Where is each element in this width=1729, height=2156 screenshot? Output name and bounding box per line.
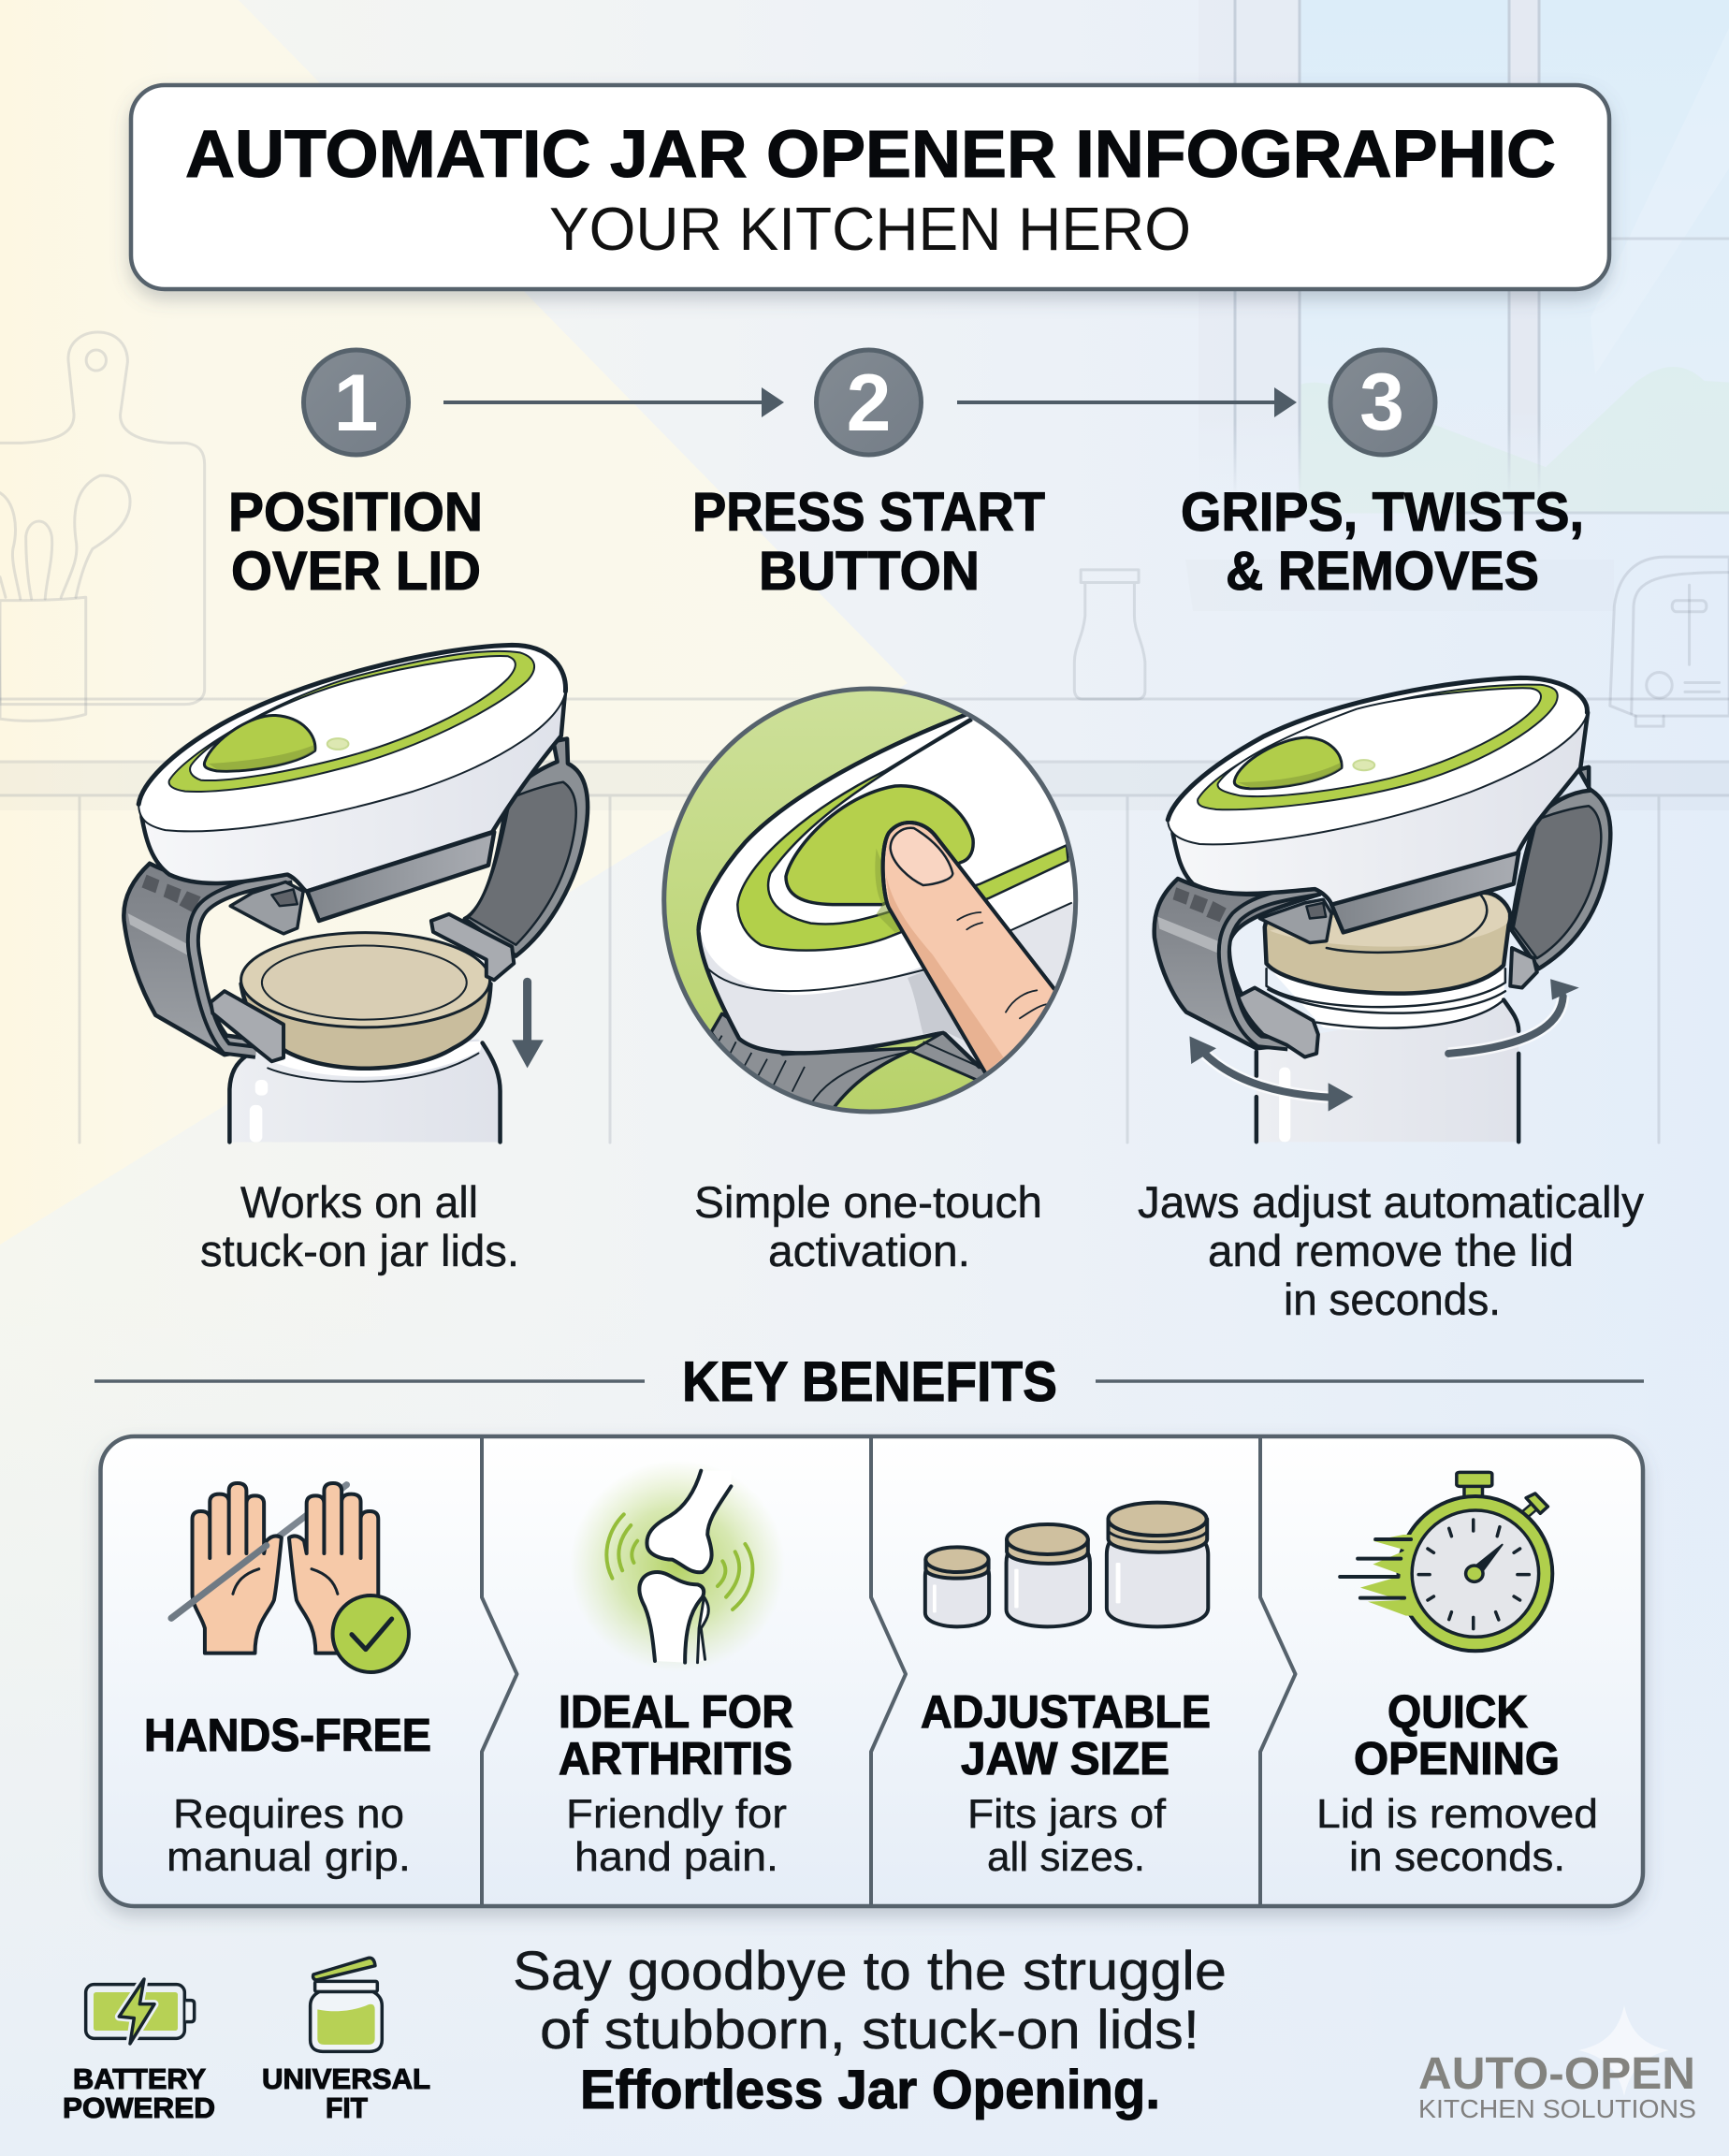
step 2 heading: PRESS START <box>692 482 1045 543</box>
description <box>566 1791 787 1880</box>
icon: hands with check <box>171 1483 409 1672</box>
twist arrows <box>1189 979 1579 1112</box>
step 1 heading <box>228 482 483 602</box>
description: Requires no <box>173 1791 404 1837</box>
step numbers and arrows <box>303 350 1435 455</box>
description <box>1316 1791 1598 1880</box>
label: POWERED <box>63 2091 215 2124</box>
finger <box>881 821 1055 1074</box>
opener body close-up <box>699 714 1097 1067</box>
illustration: opener gripping and twisting lid <box>1155 677 1610 1142</box>
step 3 badge <box>1330 350 1435 455</box>
counter and cabinets <box>0 560 1729 1143</box>
step 1 heading: OVER LID <box>231 541 481 602</box>
step 3 caption: and remove the lid <box>1208 1226 1574 1275</box>
icon: open jar <box>311 1958 382 2051</box>
step 3 heading <box>1181 482 1584 602</box>
step 2 caption: activation. <box>768 1226 970 1275</box>
start button <box>204 715 315 771</box>
jar lid <box>241 933 490 1069</box>
opener body <box>138 645 566 921</box>
arrow 1 to 2 <box>443 387 784 417</box>
benefit: adjustable jaw <box>921 1503 1211 1880</box>
closing message: of stubborn, stuck-on lids! <box>540 2000 1199 2061</box>
illustration: opener positioned over lid <box>124 645 588 1142</box>
step 1 heading: POSITION <box>228 482 483 543</box>
label: ARTHRITIS <box>559 1734 792 1785</box>
cutting board and utensils <box>0 332 205 721</box>
step 2 caption: Simple one-touch <box>694 1177 1042 1227</box>
step 3 badge: 3 <box>1359 357 1404 447</box>
step 3 caption: Jaws adjust automatically <box>1138 1177 1645 1227</box>
description <box>167 1791 411 1880</box>
step 1 caption: stuck-on jar lids. <box>200 1226 519 1275</box>
left strap <box>1155 879 1320 1048</box>
icon: knee joint <box>570 1460 785 1672</box>
LED <box>1353 760 1374 770</box>
benefit: hands-free <box>144 1483 431 1880</box>
label: HANDS-FREE <box>144 1711 431 1761</box>
step 3 heading: GRIPS, TWISTS, <box>1181 482 1584 543</box>
feature: universal fit <box>262 1958 430 2124</box>
green ring close-up <box>737 719 1068 951</box>
icon: three jars <box>925 1503 1208 1626</box>
benefit: arthritis <box>559 1460 793 1880</box>
illustration: finger pressing start button <box>664 689 1097 1114</box>
icon: stopwatch <box>1340 1472 1552 1651</box>
label: BATTERY <box>73 2062 206 2095</box>
feature: battery powered <box>63 1979 215 2124</box>
benefit: quick opening <box>1316 1472 1598 1880</box>
step 2 caption <box>694 1177 1042 1275</box>
description: hand pain. <box>574 1834 778 1880</box>
right strap <box>465 738 588 956</box>
description: Friendly for <box>566 1791 787 1837</box>
icon: sparkle <box>1578 2005 1669 2096</box>
subtitle: YOUR KITCHEN HERO <box>549 195 1191 263</box>
label: IDEAL FOR <box>559 1687 793 1738</box>
step 1 caption <box>200 1177 519 1275</box>
logo: Auto-Open Kitchen Solutions: KITCHEN SOLUTIONS <box>1418 2094 1696 2123</box>
mechanism and jaws <box>1238 899 1537 1057</box>
description: Fits jars of <box>967 1791 1167 1837</box>
icon: battery <box>86 1979 195 2044</box>
logo: Auto-Open Kitchen Solutions: AUTO-OPEN <box>1418 2049 1695 2099</box>
start button <box>1234 737 1342 789</box>
right strap <box>1512 767 1610 969</box>
left strap <box>124 864 291 1055</box>
closing message: Effortless Jar Opening. <box>580 2060 1160 2120</box>
step 2 heading <box>692 482 1045 602</box>
step 2 badge: 2 <box>847 358 891 448</box>
lower strap <box>711 1013 989 1114</box>
jar lid <box>1265 893 1510 994</box>
label <box>1354 1687 1560 1785</box>
step 1 badge <box>303 350 408 455</box>
jar <box>1257 969 1518 1142</box>
label: QUICK <box>1388 1687 1528 1738</box>
LED <box>327 738 348 750</box>
key benefits heading: KEY BENEFITS <box>682 1350 1057 1413</box>
step 2 heading: BUTTON <box>759 541 980 602</box>
label: FIT <box>326 2091 368 2124</box>
step 3 caption: in seconds. <box>1284 1275 1501 1324</box>
step 3 caption <box>1138 1177 1645 1324</box>
label: JAW SIZE <box>961 1734 1170 1785</box>
label: ADJUSTABLE <box>921 1687 1211 1738</box>
jar <box>229 1040 501 1142</box>
description: Lid is removed <box>1316 1791 1598 1837</box>
label <box>63 2062 215 2124</box>
description: manual grip. <box>167 1834 411 1880</box>
title panel <box>131 85 1609 289</box>
step 1 caption: Works on all <box>240 1177 478 1227</box>
down arrow <box>512 982 544 1068</box>
step 1 badge: 1 <box>334 358 378 448</box>
window <box>1199 0 1729 515</box>
label <box>262 2062 430 2124</box>
opener body <box>1168 677 1588 932</box>
description: in seconds. <box>1349 1834 1565 1880</box>
benefits panel <box>101 1436 1643 1906</box>
label <box>921 1687 1211 1785</box>
label: UNIVERSAL <box>262 2062 430 2095</box>
logo: Auto-Open Kitchen Solutions <box>1418 2005 1696 2123</box>
label: OPENING <box>1354 1734 1560 1785</box>
closing message: Say goodbye to the struggle <box>513 1941 1227 2002</box>
closing message <box>513 1941 1227 2120</box>
arrow 2 to 3 <box>957 387 1297 417</box>
mechanism and jaws <box>211 881 514 1061</box>
green ring <box>1198 685 1558 809</box>
description <box>967 1791 1167 1880</box>
start button close-up <box>786 786 973 905</box>
step 2 badge <box>816 350 921 455</box>
heading: AUTOMATIC JAR OPENER INFOGRAPHIC <box>185 118 1556 192</box>
description: all sizes. <box>987 1834 1145 1880</box>
label <box>559 1687 793 1785</box>
green ring <box>169 651 534 792</box>
step 3 heading: & REMOVES <box>1226 541 1539 602</box>
bottle and toaster <box>1074 557 1729 726</box>
